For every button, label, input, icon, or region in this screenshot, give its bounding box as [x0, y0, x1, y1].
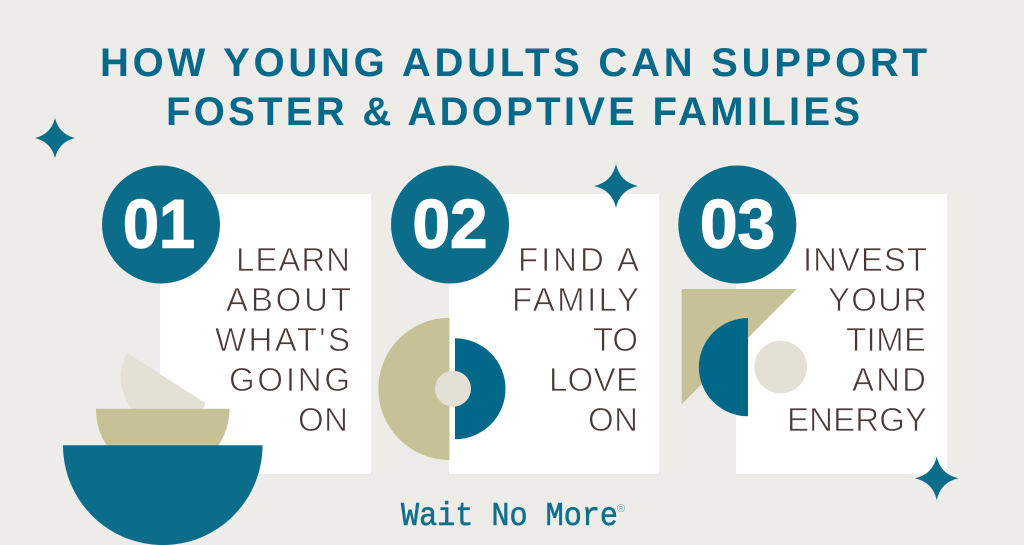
logo: Wait No More: Wait No More: [401, 498, 618, 535]
number badge 03: 03: [700, 186, 775, 262]
number badge 01: 01: [123, 186, 195, 262]
step 3 text: AND: [852, 361, 926, 398]
step 2 text: TO: [593, 321, 638, 358]
step 2 text: ON: [588, 401, 638, 438]
illustration: half circles: [378, 318, 506, 460]
title: FOSTER & ADOPTIVE FAMILIES: [166, 90, 860, 134]
step 2 text: FIND A: [518, 241, 639, 278]
illustration: stacked bowls: [63, 353, 262, 545]
step 3 text: INVEST: [803, 241, 927, 278]
step 3 text: YOUR: [828, 281, 927, 318]
step 3 text: ENERGY: [787, 401, 927, 438]
illustration: triangle and circles: [682, 289, 807, 416]
card 2: [449, 194, 659, 474]
number badge 02: [391, 166, 509, 284]
title: HOW YOUNG ADULTS CAN SUPPORT: [100, 41, 927, 85]
number badge 01: [102, 166, 220, 284]
number badge 02: 02: [412, 186, 488, 262]
step 1 text: ABOUT: [226, 281, 351, 318]
step 3 text: [787, 241, 927, 438]
step 3 text: TIME: [846, 321, 926, 358]
step 1 text: LEARN: [236, 241, 350, 278]
step 1 text: GOING: [229, 361, 350, 398]
step 2 text: [512, 241, 639, 438]
icon: sparkle bottom right: [915, 456, 958, 500]
step 1 text: ON: [298, 401, 348, 438]
panel: step 1: [63, 166, 371, 545]
number badge 03: [678, 166, 796, 284]
step 2 text: FAMILY: [512, 281, 639, 318]
panel: step 3: [678, 166, 947, 474]
step 1 text: WHAT'S: [215, 321, 350, 358]
step 2 text: LOVE: [549, 361, 638, 398]
card 1: [160, 194, 371, 474]
card 3: [736, 194, 947, 474]
logo: Wait No More: ®: [617, 503, 625, 515]
step 1 text: [215, 241, 351, 438]
icon: sparkle left: [35, 118, 75, 158]
title: [100, 41, 927, 134]
panel: step 2: [378, 166, 659, 474]
icon: sparkle middle: [594, 164, 638, 208]
